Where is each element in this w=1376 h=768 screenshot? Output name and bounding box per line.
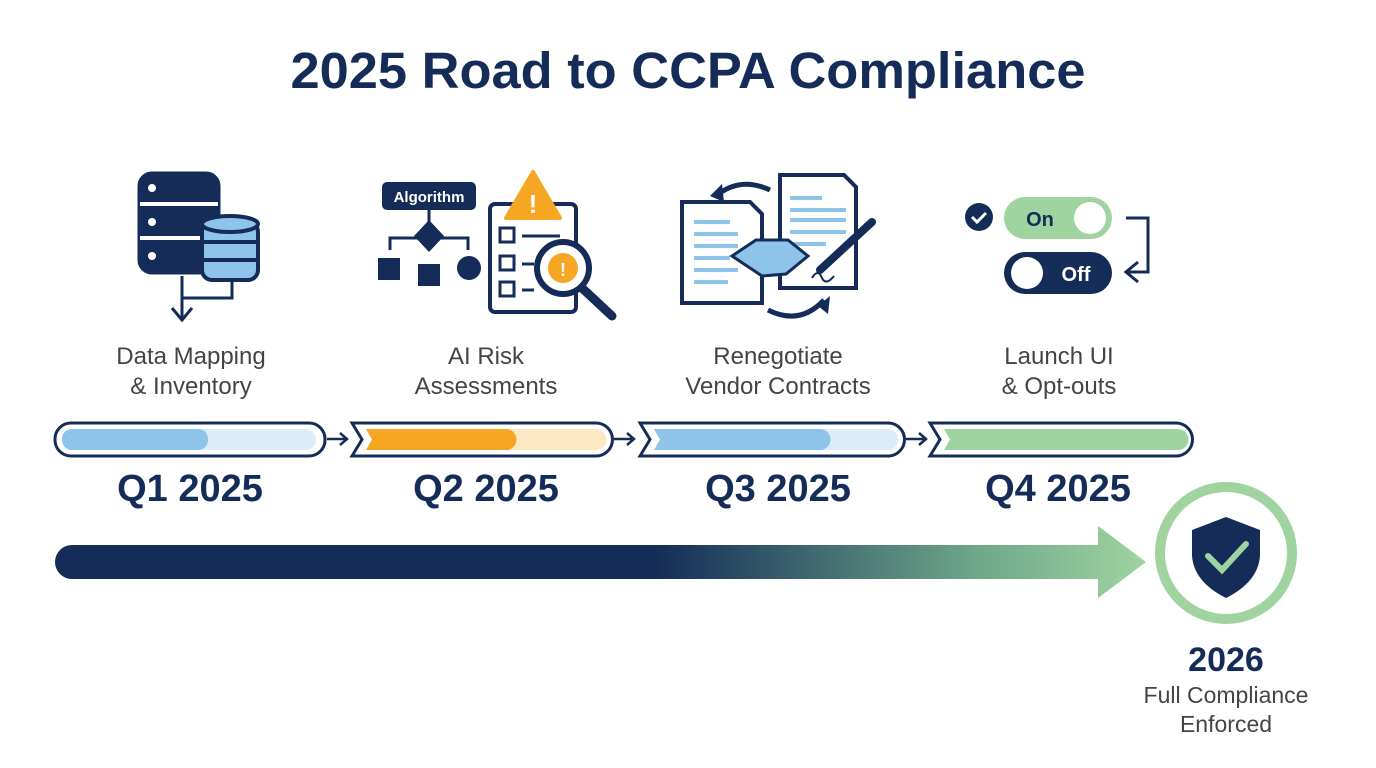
label: vendor contracts: Renegotiate: [713, 343, 843, 370]
bar: Q3: [640, 423, 926, 456]
icon: algorithm risk: Algorithm: [394, 189, 464, 206]
icon: toggles: Off: [1062, 264, 1091, 286]
caption: full compliance: Full Compliance: [1144, 682, 1308, 708]
label: launch ui: & Opt-outs: [1002, 373, 1116, 400]
icon: toggles: On: [1026, 209, 1054, 231]
icon: shield: [1160, 487, 1292, 619]
quarter labels: Q3 2025: [705, 468, 851, 510]
icon: database: [138, 172, 258, 320]
quarter labels: [117, 468, 1131, 510]
title: 2025 Road to CCPA Compliance: [290, 42, 1086, 99]
arrow: timeline: [55, 526, 1146, 598]
icon: toggles: [965, 197, 1148, 294]
label: 2026: 2026: [1188, 641, 1264, 679]
icon: algorithm risk: !: [529, 189, 537, 219]
bar: Q4: [930, 423, 1192, 456]
label: data mapping: & Inventory: [130, 373, 252, 400]
caption: full compliance: Enforced: [1180, 711, 1272, 737]
quarter labels: Q1 2025: [117, 468, 263, 510]
label: launch ui: Launch UI: [1004, 343, 1114, 370]
bar: Q1: [55, 423, 347, 456]
icon: contracts: [682, 175, 872, 316]
label: vendor contracts: Vendor Contracts: [685, 373, 871, 400]
quarter labels: Q4 2025: [985, 468, 1131, 510]
quarter labels: Q2 2025: [413, 468, 559, 510]
bar: Q2: [352, 423, 634, 456]
icon: algorithm risk: [378, 172, 612, 316]
label: ai risk: Assessments: [415, 373, 557, 400]
icon: algorithm risk: !: [560, 260, 566, 280]
label: ai risk: AI Risk: [448, 343, 524, 370]
label: data mapping: Data Mapping: [116, 343, 266, 370]
